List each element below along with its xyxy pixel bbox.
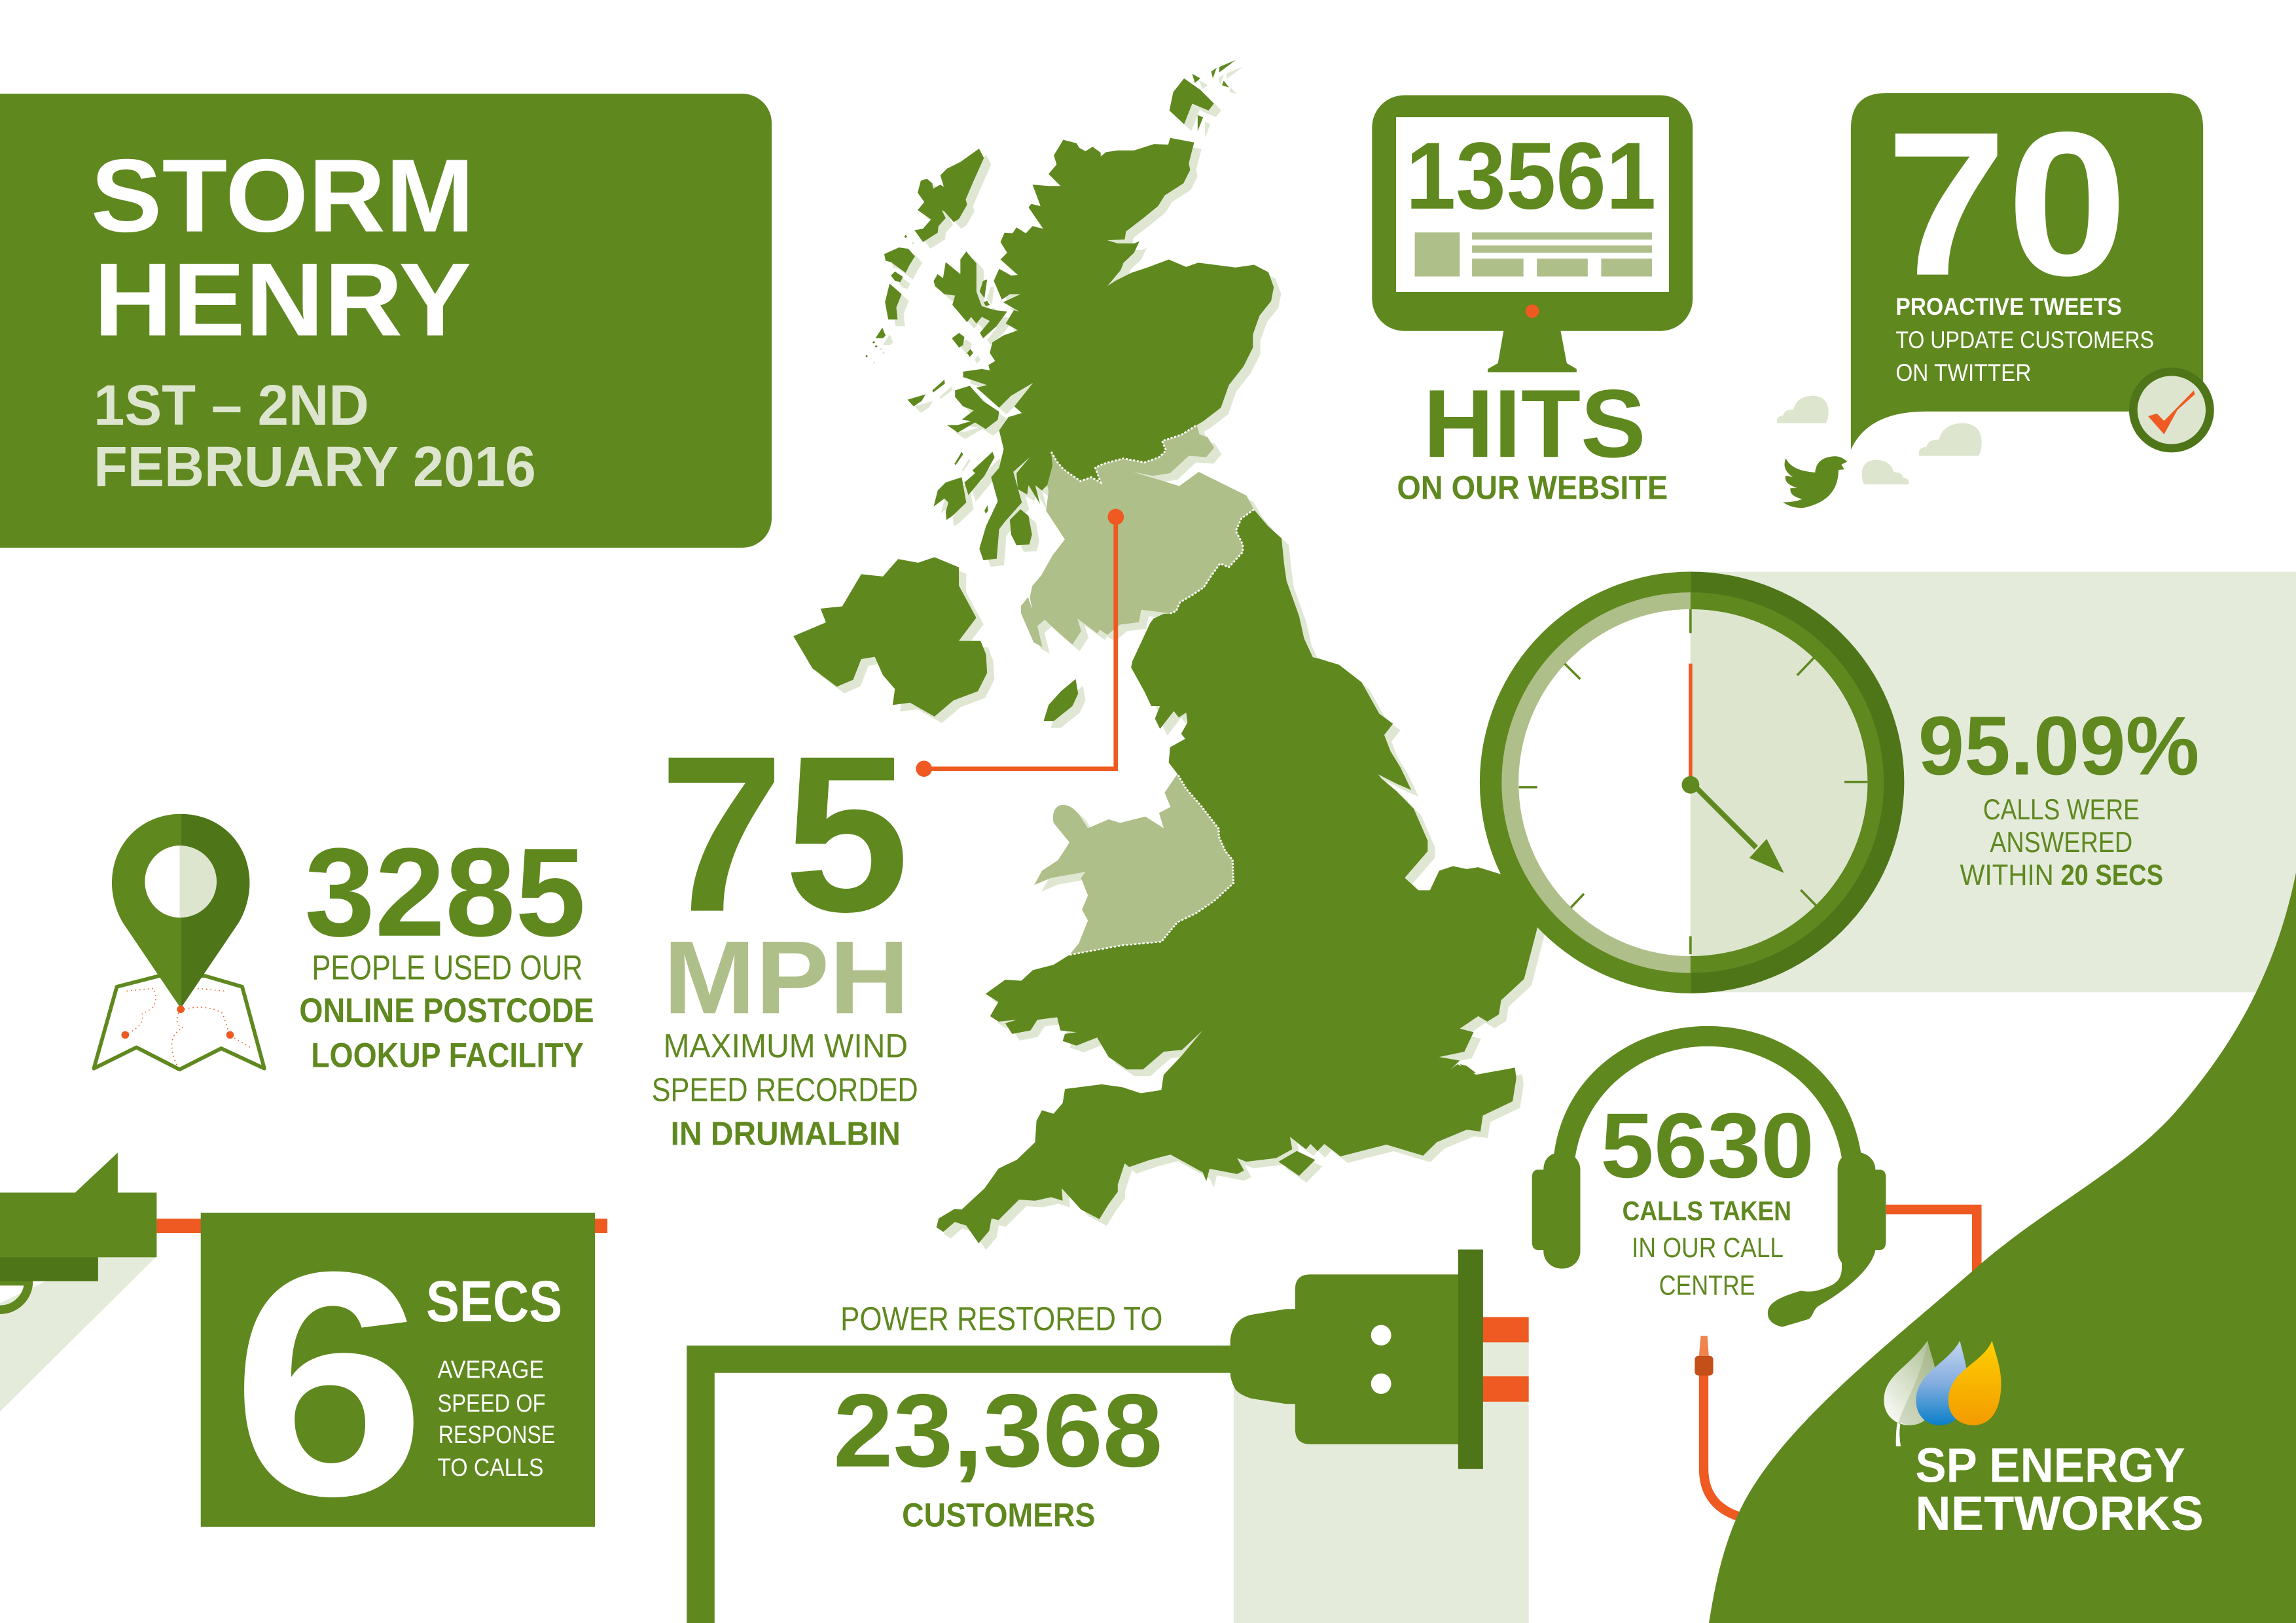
caption: average speed: TO CALLS	[437, 1454, 543, 1482]
panel: storm title	[0, 94, 772, 548]
icon: clouds	[1777, 396, 1982, 484]
stat: 95.09% calls answered: CALLS WERE	[1983, 793, 2140, 826]
text: hits on our website: HITS	[1424, 370, 1646, 478]
stat: 3285 postcode lookups: 3285	[304, 822, 586, 963]
title: storm henry	[91, 137, 475, 357]
dotted borders between regions	[1051, 425, 1254, 955]
stat: 75 mph: 75	[659, 710, 909, 959]
tweets caption	[1895, 293, 2154, 386]
panel: green corner curve	[1709, 873, 2296, 1623]
icon: monitor with website hits	[1372, 96, 1693, 372]
icon: map with location pin	[94, 814, 264, 1069]
title: storm henry: HENRY	[94, 241, 471, 357]
stat: 3285 postcode lookups	[299, 822, 594, 1075]
icon: headset	[1532, 1026, 1886, 1327]
clock second hand	[1690, 664, 1691, 782]
map of the UK	[793, 60, 1545, 1250]
caption: average speed: AVERAGE	[437, 1357, 544, 1384]
stat: 3285 postcode lookups: LOOKUP FACILITY	[311, 1036, 584, 1075]
panel: tweets speech bubble	[1851, 90, 2214, 452]
caption: average speed: RESPONSE	[439, 1421, 555, 1449]
region: Northern Ireland	[793, 557, 987, 717]
map drop shadow	[800, 67, 1545, 1250]
region: Isle of Man	[1043, 679, 1078, 721]
tweets caption: PROACTIVE TWEETS	[1895, 293, 2122, 320]
caption: average speed: SPEED OF	[437, 1390, 546, 1418]
stat: 23,368 customers: POWER RESTORED TO	[840, 1300, 1162, 1338]
stat: 5630 calls taken: 5630	[1600, 1094, 1814, 1197]
icon: twitter bird	[1783, 456, 1847, 508]
location pin	[112, 814, 249, 1008]
subtitle: dates: 1ST – 2ND	[94, 374, 369, 437]
clock minute hand	[1681, 776, 1784, 873]
subtitle: dates	[94, 374, 536, 499]
stat: 5630 calls taken	[1600, 1094, 1814, 1301]
number: 6: 6	[231, 1205, 426, 1562]
stat: 95.09% calls answered: ANSWERED	[1990, 826, 2132, 859]
stat: 95.09% calls answered	[1918, 700, 2199, 891]
region: north Wales and Merseyside (highlighted)	[1034, 774, 1234, 955]
tweets caption: TO UPDATE CUSTOMERS	[1895, 327, 2154, 353]
map dotted routes	[124, 988, 252, 1066]
logo wordmark: NETWORKS	[1915, 1486, 2204, 1541]
icon: plug with cord, response time	[0, 1152, 607, 1412]
stat: 95.09% calls answered: WITHIN	[1960, 859, 2054, 891]
headset wire	[1886, 1209, 1977, 1289]
panel: calls answered background	[1690, 572, 2296, 992]
screen layout blocks	[1415, 232, 1652, 277]
region: northern Scotland	[865, 60, 1274, 560]
stat: 75 mph: MAXIMUM WIND	[663, 1026, 908, 1064]
logo wordmark: SP ENERGY	[1915, 1438, 2185, 1493]
stat: 5630 calls taken: CALLS TAKEN	[1623, 1196, 1791, 1226]
stat: 75 mph	[652, 710, 918, 1152]
logo wordmark	[1915, 1438, 2204, 1541]
caption: average speed	[437, 1357, 555, 1482]
title: storm henry: STORM	[91, 137, 475, 254]
stat: 5630 calls taken: IN OUR CALL	[1632, 1233, 1784, 1264]
icon: check badge	[2129, 368, 2214, 452]
stat: 75 mph: MPH	[663, 919, 909, 1035]
logo mark: leaf and drops	[1884, 1340, 2001, 1446]
subtitle: dates: FEBRUARY 2016	[94, 435, 536, 499]
stat: 23,368 customers: 23,368	[833, 1372, 1162, 1489]
clock ticks	[1519, 609, 1867, 954]
stat: 23,368 customers: CUSTOMERS	[902, 1495, 1095, 1533]
region: southern Scotland (highlighted)	[1021, 425, 1254, 647]
number: 70: 70	[1886, 90, 2128, 319]
jack plug wire	[1695, 1336, 1746, 1518]
logo: SP Energy Networks	[1884, 1340, 2204, 1541]
text: hits on our website	[1397, 370, 1668, 507]
icon: power plug with cable	[687, 1249, 1529, 1623]
number: 13561: 13561	[1406, 122, 1656, 229]
label: secs: SECS	[426, 1268, 562, 1334]
stat: 95.09% calls answered: 95.09%	[1918, 700, 2199, 793]
icon: clock	[1480, 572, 1904, 993]
pointer: Drumalbin wind speed	[916, 509, 1124, 777]
region: England	[937, 510, 1538, 1243]
stat: 3285 postcode lookups: PEOPLE USED OUR	[312, 948, 583, 987]
stat: 95.09% calls answered: 20 SECS	[2060, 859, 2163, 891]
stat: 75 mph: SPEED RECORDED	[652, 1071, 918, 1109]
stat: 3285 postcode lookups: ONLINE POSTCODE	[299, 991, 594, 1030]
stat: 5630 calls taken: CENTRE	[1659, 1270, 1755, 1301]
text: hits on our website: ON OUR WEBSITE	[1397, 469, 1668, 507]
tweets caption: ON TWITTER	[1895, 359, 2032, 386]
stat: 75 mph: IN DRUMALBIN	[671, 1115, 901, 1152]
stat: 23,368 customers	[833, 1300, 1162, 1533]
panel: 6 secs response	[201, 1205, 595, 1562]
